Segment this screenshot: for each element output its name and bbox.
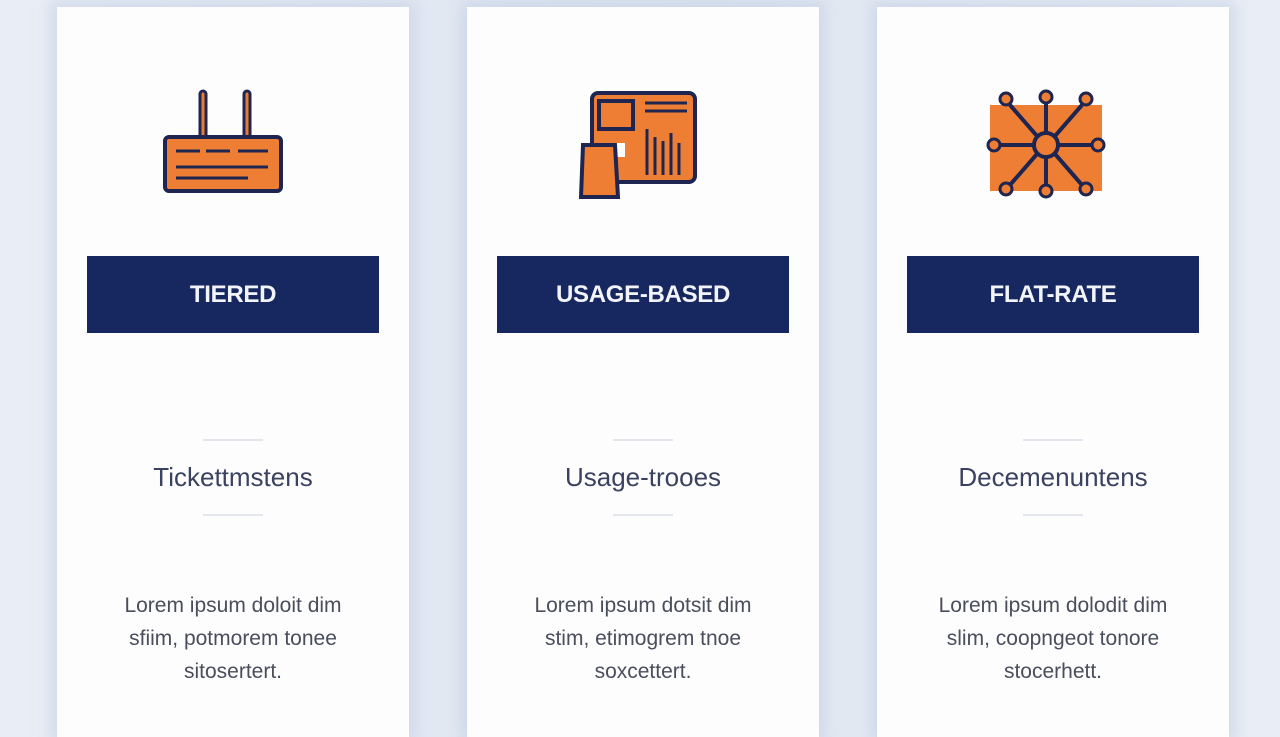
text block: Lorem ipsum dotsit dim xyxy=(534,594,752,617)
text block: soxcettert. xyxy=(595,660,691,683)
text block: stim, etimogrem tnoe xyxy=(545,627,741,650)
banner: TIERED xyxy=(87,256,379,333)
text block: sitosertert. xyxy=(184,660,282,683)
text block: stocerhett. xyxy=(1004,660,1102,683)
panel: flat-rate xyxy=(877,7,1229,737)
panel: usage-based xyxy=(467,7,819,737)
icon: network hub xyxy=(986,90,1106,198)
banner: FLAT-RATE: FLAT-RATE xyxy=(989,280,1117,308)
text block: Lorem ipsum doloit dim xyxy=(124,594,342,617)
banner: USAGE-BASED xyxy=(497,256,789,333)
panel: tiered xyxy=(57,7,409,737)
text block xyxy=(534,594,752,683)
text block xyxy=(124,594,342,683)
subtitle: Usage-trooes xyxy=(565,462,721,492)
icon: router xyxy=(163,90,283,193)
text block: sfiim, potmorem tonee xyxy=(129,627,337,650)
subtitle: Decemenuntens xyxy=(958,462,1148,492)
banner: FLAT-RATE xyxy=(907,256,1199,333)
text block xyxy=(939,594,1167,683)
text block: slim, coopngeot tonore xyxy=(947,627,1159,650)
text block: Lorem ipsum dolodit dim xyxy=(939,594,1167,617)
subtitle: Tickettmstens xyxy=(153,462,313,492)
banner: USAGE-BASED: USAGE-BASED xyxy=(556,280,730,308)
banner: TIERED: TIERED xyxy=(190,280,276,308)
icon: dashboard xyxy=(578,91,697,199)
